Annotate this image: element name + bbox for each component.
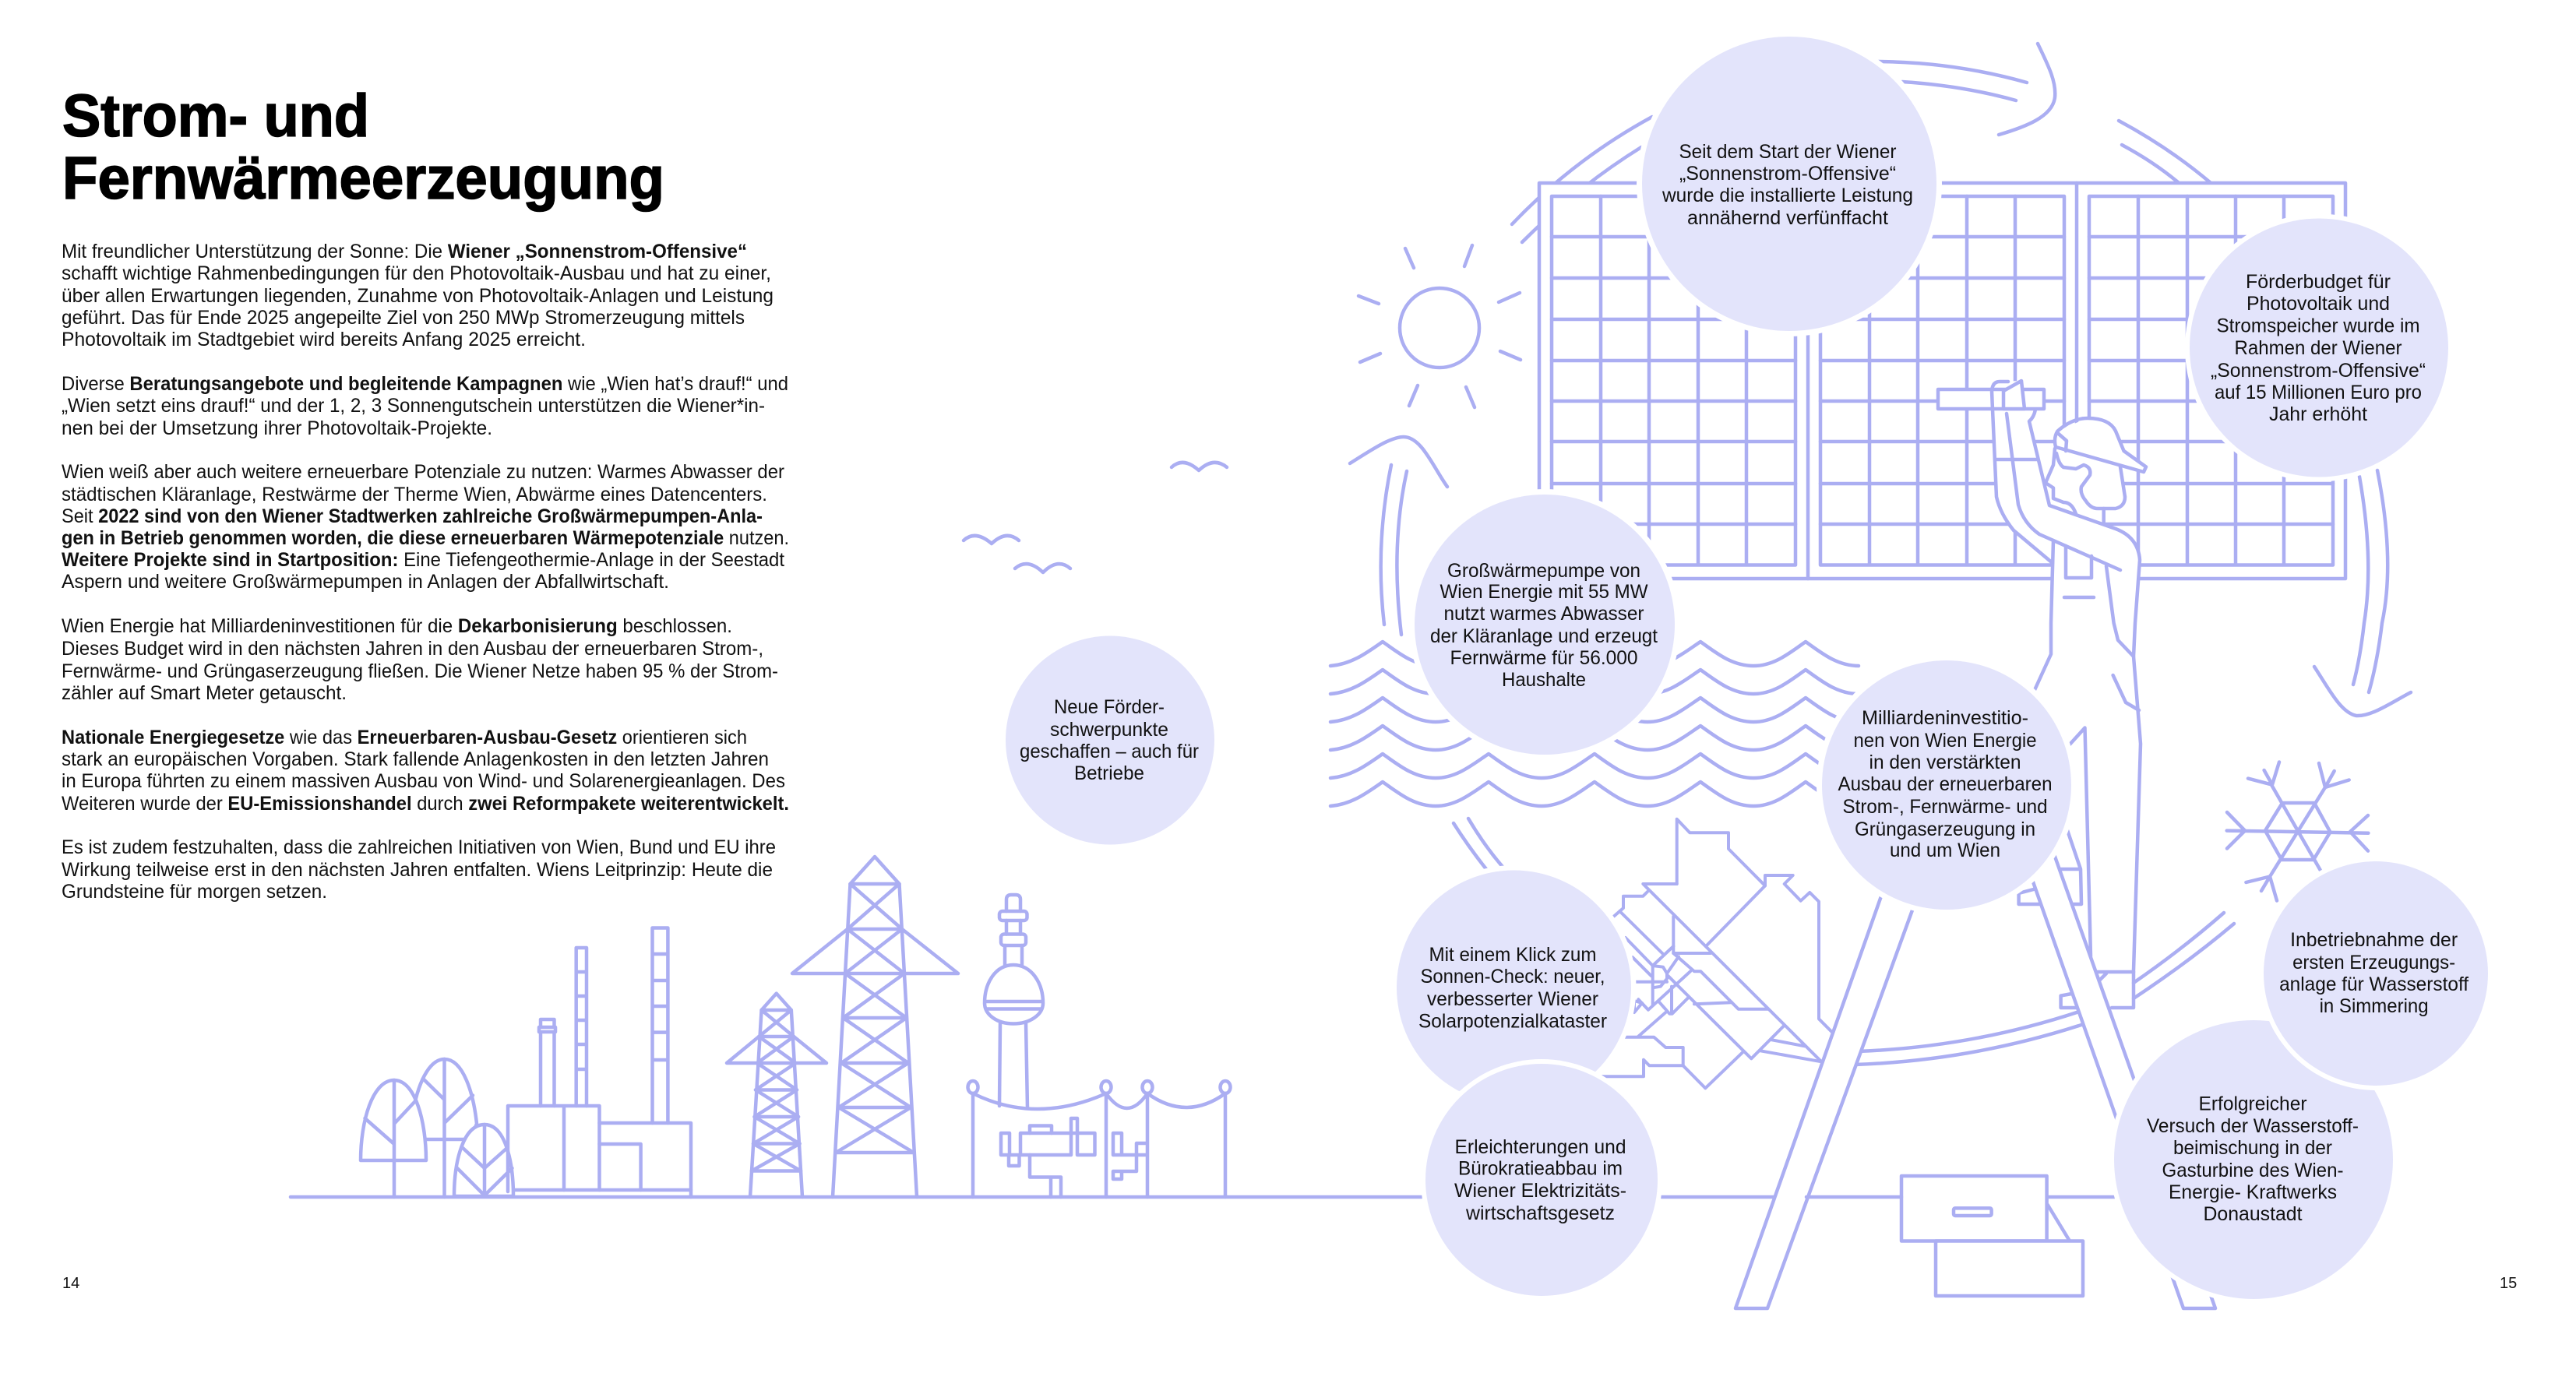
circle: Neue Förderschwerpunkte: Betriebe xyxy=(1074,762,1144,784)
circle: Förderbudget xyxy=(2185,213,2453,481)
circle: Wasserstoff-Beimischung: Versuch der Wasserstoff- xyxy=(2147,1115,2359,1137)
circle: Neue Förderschwerpunkte: geschaffen – auch für xyxy=(1020,741,1199,762)
text block: erneuerbare Potenziale: Seit 2022 sind von den Wiener Stadtwerken zahlreiche Großwärmepumpen-Anla- xyxy=(62,505,763,527)
text block: Sonnenstrom-Offensive: über allen Erwartungen liegenden, Zunahme von Photovoltaik-Anlagen und Leistung xyxy=(62,285,774,307)
circle: Wasserstoff-Erzeugungsanlage: in Simmering xyxy=(2320,995,2429,1017)
text block: Sonnenstrom-Offensive: Mit freundlicher Unterstützung der Sonne: Die Wiener „Sonnenstrom-Offensive“ xyxy=(62,241,747,262)
circle: Neue Förderschwerpunkte: schwerpunkte xyxy=(1050,719,1168,741)
text block: Nationale Energiegesetze xyxy=(62,727,789,815)
icon: birds xyxy=(964,463,1227,572)
circle: Sonnenstrom-Offensive Leistung: Seit dem Start der Wiener xyxy=(1679,141,1896,163)
circle: Sonnen-Check xyxy=(1391,865,1636,1110)
circle: Förderbudget: Rahmen der Wiener xyxy=(2234,337,2402,359)
circle: Wasserstoff-Beimischung: Gasturbine des Wien- xyxy=(2162,1160,2343,1181)
circle: Wasserstoff-Beimischung xyxy=(2109,1016,2398,1304)
circle: Großwärmepumpe: Haushalte xyxy=(1502,669,1586,691)
text block: Dekarbonisierung: Fernwärme- und Grüngaserzeugung fließen. Die Wiener Netze haben 95 % der Strom- xyxy=(62,660,778,682)
circle: Wasserstoff-Erzeugungsanlage: Inbetriebnahme der xyxy=(2290,929,2458,951)
circle: Neue Förderschwerpunkte: Neue Förder- xyxy=(1054,696,1165,718)
icon: snowflake xyxy=(2227,762,2368,900)
text block: erneuerbare Potenziale: städtischen Kläranlage, Restwärme der Therme Wien, Abwärme eines Datencenters. xyxy=(62,484,767,505)
text block: Nationale Energiegesetze: Nationale Energiegesetze wie das Erneuerbaren-Ausbau-Gesetz orientieren sich xyxy=(62,727,747,748)
circle: Förderbudget: Förderbudget für xyxy=(2246,271,2391,293)
page number 15: 15 xyxy=(2500,1275,2517,1292)
page number 14: 14 xyxy=(62,1275,79,1292)
text block: Dekarbonisierung: zähler auf Smart Meter getauscht. xyxy=(62,682,347,704)
text block: Nationale Energiegesetze: Weiteren wurde der EU-Emissionshandel durch zwei Reformpakete weiterentwickelt. xyxy=(62,793,789,815)
icon: large pylon xyxy=(792,857,958,1197)
circle: Großwärmepumpe: der Kläranlage und erzeugt xyxy=(1430,625,1658,647)
text block: erneuerbare Potenziale: gen in Betrieb genommen worden, die diese erneuerbaren Wärmepotenziale nutzen. xyxy=(62,527,789,549)
water waves xyxy=(1330,642,1859,806)
circle: Sonnenstrom-Offensive Leistung: annähernd verfünffacht xyxy=(1687,207,1888,229)
circle: Milliardeninvestitionen: nen von Wien Energie xyxy=(1854,730,2036,752)
circle: Elektrizitätswirtschaftsgesetz: wirtschaftsgesetz xyxy=(1465,1202,1615,1224)
circle: Milliardeninvestitionen: Ausbau der erneuerbaren xyxy=(1838,773,2052,795)
circle: Sonnen-Check: Sonnen-Check: neuer, xyxy=(1421,966,1605,987)
title xyxy=(62,83,664,212)
text block: Nationale Energiegesetze: in Europa führten zu einem massiven Ausbau von Wind- und Solarenergieanlagen. Des xyxy=(62,770,785,792)
circle: Großwärmepumpe xyxy=(1409,489,1680,760)
circle: Wasserstoff-Beimischung: Erfolgreicher xyxy=(2198,1093,2307,1115)
text block: Leitprinzip: Grundsteine für morgen setzen. xyxy=(62,881,327,903)
icon: trees xyxy=(361,1059,513,1197)
text block: erneuerbare Potenziale: Aspern und weitere Großwärmepumpen in Anlagen der Abfallwirtschaft. xyxy=(62,571,669,593)
circle: Förderbudget: Stromspeicher wurde im xyxy=(2217,315,2419,336)
circle: Förderbudget: „Sonnenstrom-Offensive“ xyxy=(2211,360,2426,382)
circle: Sonnenstrom-Offensive Leistung: wurde die installierte Leistung xyxy=(1662,185,1913,206)
icon: tower xyxy=(985,895,1043,1108)
circle: Wasserstoff-Erzeugungsanlage xyxy=(2259,857,2493,1090)
circle: Sonnen-Check: Mit einem Klick zum xyxy=(1429,944,1597,966)
text block: Sonnenstrom-Offensive: Photovoltaik im Stadtgebiet wird bereits Anfang 2025 erreicht. xyxy=(62,329,586,350)
circle: Milliardeninvestitionen: Milliardeninvestitio- xyxy=(1862,707,2028,729)
circle: Wasserstoff-Beimischung: Donaustadt xyxy=(2203,1203,2303,1225)
icon: overhead wires and pipes xyxy=(967,1081,1231,1197)
circle: Milliardeninvestitionen: Strom-, Fernwärme- und xyxy=(1843,796,2047,818)
circle: Förderbudget: Photovoltaik und xyxy=(2247,293,2390,315)
icon: power plant xyxy=(508,928,691,1197)
icon: small pylon xyxy=(727,994,826,1197)
title: Fernwärmeerzeugung xyxy=(62,145,664,212)
circle: Großwärmepumpe: Großwärmepumpe von xyxy=(1447,560,1640,582)
ground line xyxy=(291,1195,2115,1199)
map of Vienna xyxy=(1602,819,1832,1088)
circle: Milliardeninvestitionen xyxy=(1817,655,2077,915)
boxes at ladder foot xyxy=(1901,1176,2083,1296)
circle: Wasserstoff-Erzeugungsanlage: anlage für Wasserstoff xyxy=(2279,973,2469,995)
text block: Leitprinzip: Wirkung teilweise erst in den nächsten Jahren entfalten. Wiens Leitprinzip: Heute die xyxy=(62,859,773,881)
circle: Sonnenstrom-Offensive Leistung: „Sonnenstrom-Offensive“ xyxy=(1679,163,1896,185)
right ladder xyxy=(2016,806,2215,1308)
circle: Neue Förderschwerpunkte xyxy=(1006,635,1214,844)
text block: Nationale Energiegesetze: stark an europäischen Vorgaben. Stark fallende Anlagenkosten in den letzten Jahren xyxy=(62,748,769,770)
text block: Dekarbonisierung: Wien Energie hat Milliardeninvestitionen für die Dekarbonisierung beschlossen. xyxy=(62,615,732,637)
circle: Wasserstoff-Beimischung: beimischung in der xyxy=(2173,1137,2332,1159)
text block: erneuerbare Potenziale: Wien weiß aber auch weitere erneuerbare Potenziale zu nutzen: Warmes Abwasser der xyxy=(62,461,784,483)
text block: Beratungsangebote: „Wien setzt eins drauf!“ und der 1, 2, 3 Sonnengutschein unterstützen die Wiener*in- xyxy=(62,395,765,417)
circle: Milliardeninvestitionen: Grüngaserzeugung in xyxy=(1855,818,2035,840)
left ladder xyxy=(1736,841,1932,1308)
text block: Beratungsangebote xyxy=(62,373,788,439)
text block: Sonnenstrom-Offensive: schafft wichtige Rahmenbedingungen für den Photovoltaik-Ausbau und hat zu einer, xyxy=(62,262,771,284)
circle: Sonnen-Check: verbesserter Wiener xyxy=(1427,988,1598,1010)
text block: erneuerbare Potenziale: Weitere Projekte sind in Startposition: Eine Tiefengeothermie-Anlage in der Seestadt xyxy=(62,549,784,571)
circle: Großwärmepumpe: nutzt warmes Abwasser xyxy=(1444,603,1644,625)
text block: Dekarbonisierung xyxy=(62,615,778,704)
icon: sun xyxy=(1358,245,1521,407)
person holding the panel xyxy=(1938,381,2146,1008)
circle: Großwärmepumpe: Wien Energie mit 55 MW xyxy=(1440,581,1648,603)
circle: Sonnenstrom-Offensive Leistung xyxy=(1637,31,1942,336)
circle: Elektrizitätswirtschaftsgesetz: Erleichterungen und xyxy=(1455,1136,1626,1158)
circle: Milliardeninvestitionen: in den verstärkten xyxy=(1869,752,2021,773)
solar panel xyxy=(1539,183,2345,579)
circle: Sonnen-Check: Solarpotenzialkataster xyxy=(1418,1011,1607,1033)
text block: Beratungsangebote: Diverse Beratungsangebote und begleitende Kampagnen wie „Wien hat’s drauf!“ und xyxy=(62,373,788,395)
text block: Leitprinzip: Es ist zudem festzuhalten, dass die zahlreichen Initiativen von Wien, Bund und EU ihre xyxy=(62,836,776,858)
text block: Dekarbonisierung: Dieses Budget wird in den nächsten Jahren in den Ausbau der erneuerbaren Strom-, xyxy=(62,638,763,660)
circle: Förderbudget: auf 15 Millionen Euro pro xyxy=(2215,382,2422,403)
title: Strom- und xyxy=(62,83,369,150)
circle: Elektrizitätswirtschaftsgesetz: Wiener Elektrizitäts- xyxy=(1454,1180,1626,1202)
circle: Förderbudget: Jahr erhöht xyxy=(2269,403,2367,425)
text block: Sonnenstrom-Offensive xyxy=(62,241,774,350)
circular arrows around solar panel xyxy=(1350,44,2411,1065)
circle: Milliardeninvestitionen: und um Wien xyxy=(1890,840,2000,861)
circle: Großwärmepumpe: Fernwärme für 56.000 xyxy=(1450,647,1637,669)
circle: Wasserstoff-Erzeugungsanlage: ersten Erzeugungs- xyxy=(2292,952,2455,973)
circle: Elektrizitätswirtschaftsgesetz: Bürokratieabbau im xyxy=(1458,1158,1623,1180)
text block: Sonnenstrom-Offensive: geführt. Das für Ende 2025 angepeilte Ziel von 250 MWp Stromerzeugung mittels xyxy=(62,307,745,329)
text block: Leitprinzip xyxy=(62,836,776,903)
circle: Wasserstoff-Beimischung: Energie- Kraftwerks xyxy=(2169,1181,2337,1203)
text block: Beratungsangebote: nen bei der Umsetzung ihrer Photovoltaik-Projekte. xyxy=(62,417,492,439)
circle: Elektrizitätswirtschaftsgesetz xyxy=(1421,1059,1662,1301)
text block: erneuerbare Potenziale xyxy=(62,461,789,593)
